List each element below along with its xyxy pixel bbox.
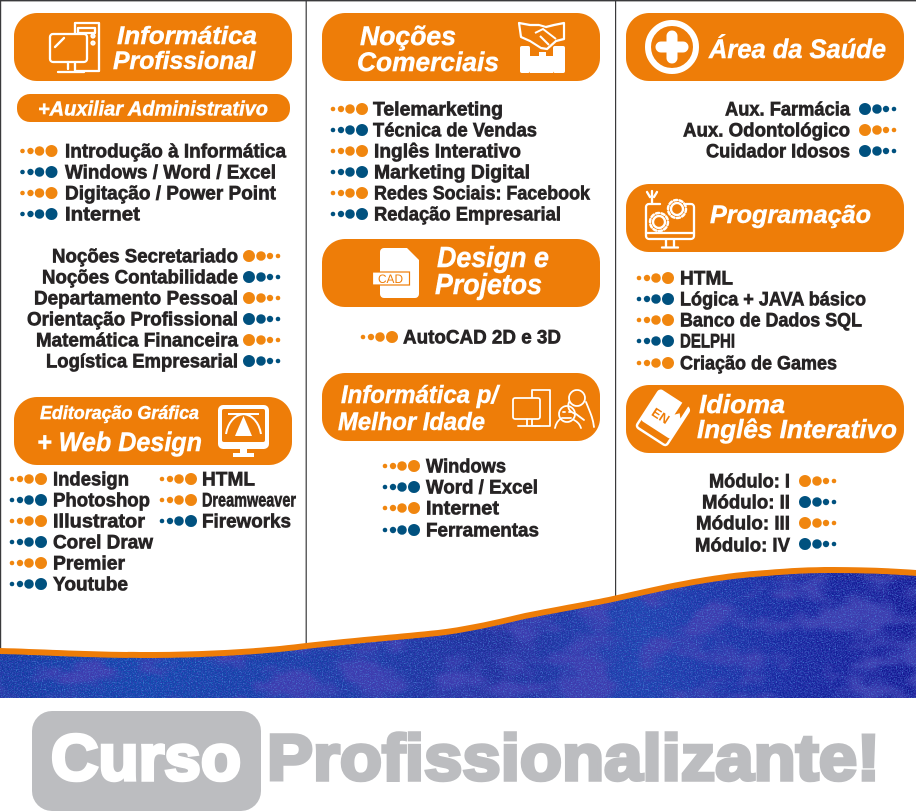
heading: Idioma Inglês Interativo xyxy=(626,385,904,453)
heading: Idioma Inglês Interativo: Idioma xyxy=(699,389,785,419)
heading: Área da Saúde xyxy=(626,13,904,81)
list: senior computing topics: Ferramentas xyxy=(426,520,539,542)
list: health courses: Cuidador Idosos xyxy=(706,142,850,162)
list: health courses: Aux. Farmácia xyxy=(725,100,850,120)
heading: Noções Comerciais: Comerciais xyxy=(357,47,499,77)
heading: Design e Projetos: Design e xyxy=(437,242,549,274)
list: design software column two: HTML xyxy=(202,470,255,490)
icon: computer and elderly couple xyxy=(513,390,594,428)
list: commercial topics: Inglês Interativo xyxy=(374,142,521,162)
list: informática topics xyxy=(20,142,286,226)
list: language modules xyxy=(695,472,836,556)
list: health courses xyxy=(683,100,896,162)
list: informática topics: Digitação / Power Point xyxy=(65,184,277,204)
heading: Editoração Gráfica + Web Design: Editoração Gráfica xyxy=(40,403,199,423)
heading: Idioma Inglês Interativo: Inglês Interativo xyxy=(697,414,897,444)
list: administrative topics: Departamento Pessoal xyxy=(34,288,238,310)
icon: handshake and bars xyxy=(519,23,565,73)
list: administrative topics: Noções Secretariado xyxy=(52,246,238,268)
list: commercial topics: Telemarketing xyxy=(373,100,503,120)
heading: Informática p/ Melhor Idade: Melhor Idade xyxy=(338,408,485,436)
list: programming topics: HTML xyxy=(680,268,733,290)
list: design software column two xyxy=(160,470,296,532)
list: commercial topics: Redes Sociais: Facebook xyxy=(374,184,590,204)
heading: Noções Comerciais xyxy=(322,13,600,81)
list: programming topics: Criação de Games xyxy=(680,354,837,374)
heading: Noções Comerciais: Noções xyxy=(360,21,456,51)
panel: right column xyxy=(626,13,904,556)
list: senior computing topics xyxy=(383,456,539,542)
heading: Informática Profissional xyxy=(14,13,292,81)
icon: English book xyxy=(636,388,691,446)
list: informática topics: Internet xyxy=(65,204,141,226)
heading: Auxiliar Administrativo xyxy=(17,94,290,122)
list: design software column two: Dreamweaver xyxy=(202,490,296,512)
list: health courses: Aux. Odontológico xyxy=(683,120,850,142)
heading: Auxiliar Administrativo: +Auxiliar Administrativo xyxy=(38,98,268,120)
list: administrative topics: Matemática Financeira xyxy=(36,330,238,352)
heading: Editoração Gráfica + Web Design xyxy=(14,397,292,465)
list: programming topics xyxy=(637,268,866,374)
list: design software column one: Corel Draw xyxy=(53,532,153,554)
icon: CAD file xyxy=(372,248,419,298)
list: design software column one: Premier xyxy=(53,554,126,574)
heading: Informática Profissional: Informática xyxy=(117,22,257,50)
heading: Editoração Gráfica + Web Design: + Web Design xyxy=(37,427,202,457)
panel: middle column xyxy=(322,13,600,542)
list: design software column one: Youtube xyxy=(53,574,128,596)
list: senior computing topics: Internet xyxy=(426,498,500,520)
list item: AutoCAD: AutoCAD 2D e 3D xyxy=(403,328,561,348)
list: administrative topics: Orientação Profissional xyxy=(27,310,238,330)
list: administrative topics: Noções Contabilidade xyxy=(42,268,238,288)
list: language modules: Módulo: IV xyxy=(695,536,790,556)
list: programming topics: DELPHI xyxy=(680,332,735,352)
list: administrative topics: Logística Empresarial xyxy=(46,352,238,372)
heading: Informática p/ Melhor Idade xyxy=(322,373,600,441)
panel: Informática Profissional column xyxy=(10,13,296,596)
list: design software column one: Illustrator xyxy=(53,512,146,532)
list: language modules: Módulo: II xyxy=(702,492,790,514)
blue wave band with orange edge xyxy=(0,560,916,698)
list: programming topics: Banco de Dados SQL xyxy=(680,310,862,332)
list: programming topics: Lógica + JAVA básico xyxy=(680,290,866,310)
list: design software column one: Photoshop xyxy=(53,490,150,512)
heading: Design e Projetos: Projetos xyxy=(435,269,542,301)
icon: design monitor xyxy=(218,405,269,457)
heading: Design e Projetos xyxy=(322,239,600,307)
list: language modules: Módulo: III xyxy=(696,514,790,534)
icon: health plus xyxy=(648,23,696,71)
list: design software column one xyxy=(10,470,153,596)
icon: desktop computer xyxy=(50,23,99,72)
list: commercial topics xyxy=(331,100,590,226)
icon: monitor with gears xyxy=(646,191,694,248)
list: design software column one: Indesign xyxy=(53,470,129,490)
list: informática topics: Windows / Word / Excel xyxy=(65,162,276,184)
heading: Programação xyxy=(626,184,904,252)
title: Curso Profissionalizante xyxy=(32,711,880,811)
title: Curso Profissionalizante: Curso xyxy=(51,721,241,794)
list: design software column two: Fireworks xyxy=(202,512,291,532)
icon: CAD file: CAD xyxy=(378,272,403,286)
title: Curso Profissionalizante: Profissionalizante! xyxy=(267,721,880,794)
list: informática topics: Introdução à Informática xyxy=(65,142,286,162)
list: language modules: Módulo: I xyxy=(709,472,790,492)
heading: Informática p/ Melhor Idade: Informática p/ xyxy=(341,381,501,409)
heading: Programação: Programação xyxy=(710,201,871,229)
list: commercial topics: Marketing Digital xyxy=(374,162,530,184)
list: senior computing topics: Windows xyxy=(426,456,506,478)
heading: Informática Profissional: Profissional xyxy=(113,47,256,75)
list: commercial topics: Redação Empresarial xyxy=(374,204,561,226)
heading: Área da Saúde: Área da Saúde xyxy=(708,33,886,64)
list: senior computing topics: Word / Excel xyxy=(426,478,538,498)
icon: English book: EN xyxy=(649,405,672,427)
list: administrative topics xyxy=(27,246,280,372)
list: commercial topics: Técnica de Vendas xyxy=(373,120,537,142)
